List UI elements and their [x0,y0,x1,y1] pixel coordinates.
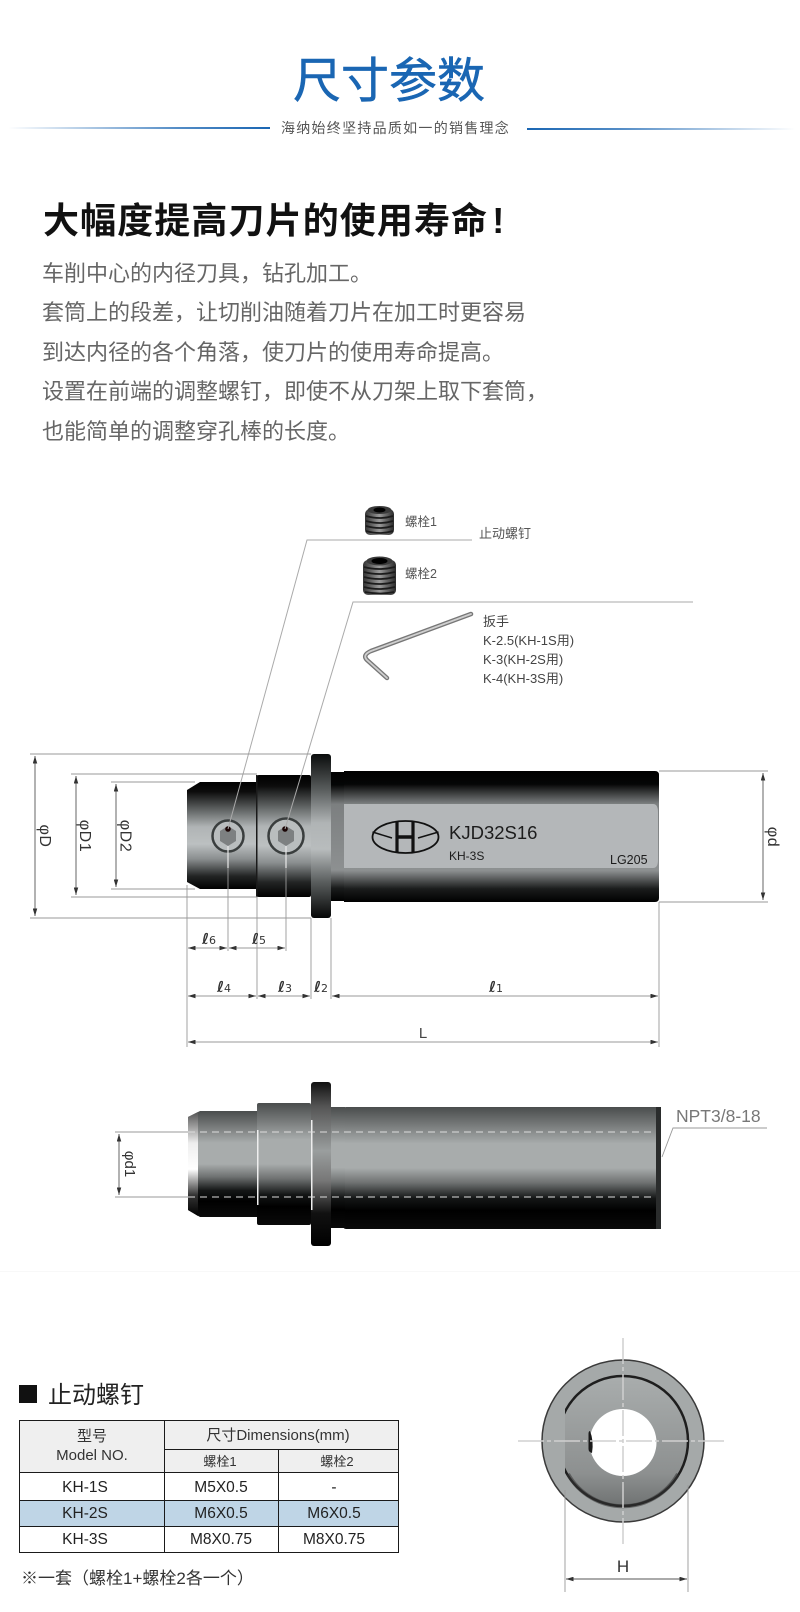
icon: hex wrench [365,614,471,678]
dimension labels: lengths: ℓ5 [251,930,266,948]
table: stop screw dimensions: KH-2S [62,1505,108,1522]
flange [311,754,331,918]
sleeve: rear view [188,1082,661,1246]
table: stop screw dimensions: M8X0.75 [303,1531,365,1548]
table: stop screw dimensions: M5X0.5 [194,1479,248,1496]
label: wrench sizes: K-4(KH-3S用) [483,671,563,686]
table: stop screw dimensions: 螺栓1 [203,1454,237,1469]
dimension: H: H [617,1557,629,1576]
neck [331,772,345,901]
dimension labels: lengths: ℓ3 [277,978,292,996]
dimension labels: diameters: φd [764,827,781,847]
icon: bolt 2 [363,556,396,595]
table: stop screw dimensions: M6X0.5 [307,1505,361,1522]
dimension lines: diameters [30,754,768,918]
white centre lines over screws [228,846,286,868]
dimension: bore d1: φd1 [121,1151,138,1177]
label: bolt 1: 螺栓1 [405,514,437,529]
dimension labels: lengths: L [419,1025,427,1042]
table: stop screw dimensions [20,1420,398,1552]
table: stop screw dimensions: 型号 [77,1428,107,1445]
dimension labels: lengths: ℓ2 [313,978,328,996]
footnote: ※一套（螺栓1+螺栓2各一个） [21,1569,254,1588]
table: stop screw dimensions: 螺栓2 [320,1454,354,1469]
dimension lines: lengths [187,868,659,1047]
engraved model: KJD32S16 [449,822,537,843]
engraved model [449,822,648,867]
centre lines [622,1338,624,1545]
description text: 也能简单的调整穿孔棒的长度。 [42,419,350,444]
logo [372,821,438,853]
table: stop screw dimensions: M6X0.5 [194,1505,248,1522]
dimension: bore d1 [115,1132,188,1197]
description text: 到达内径的各个角落，使刀片的使用寿命提高。 [42,340,504,365]
engraved model: KH-3S [449,849,484,863]
leader line: bolt 1 [228,540,472,829]
table: stop screw dimensions: KH-3S [62,1531,108,1548]
engraved model: LG205 [610,853,648,867]
label: NPT thread: NPT3/8-18 [676,1106,761,1126]
end view of sleeve [518,1338,726,1545]
description text: 车削中心的内径刀具，钻孔加工。 [42,261,372,286]
description text [42,261,548,444]
subtitle with gradient rules: 海纳始终坚持品质如一的销售理念 [281,120,510,136]
leader line: bolt 2 [285,602,693,829]
dimension labels: diameters [36,820,781,852]
dimension labels: diameters: φD2 [116,820,134,852]
screw hole 2 [268,818,304,854]
label: wrench sizes: K-2.5(KH-1S用) [483,633,574,648]
dimension labels: diameters: φD [36,824,53,848]
highlighted row [20,1500,398,1526]
icon: bolt 1 [365,506,394,535]
table: stop screw dimensions: - [331,1479,337,1496]
label: NPT thread [662,1106,767,1157]
label: wrench sizes: K-3(KH-2S用) [483,652,563,667]
table: stop screw dimensions: M8X0.75 [190,1531,252,1548]
table: stop screw dimensions: KH-1S [62,1479,108,1496]
dimension labels: diameters: φD1 [76,820,93,852]
title: 尺寸参数 [293,55,485,108]
heading: stop screw table: 止动螺钉 [48,1382,144,1409]
table header [20,1420,398,1472]
middle step [257,775,311,897]
main body [344,771,659,902]
dimension labels: lengths [201,930,503,1042]
milled flat [344,804,658,868]
label: wrench sizes: 扳手 [483,614,509,629]
dimension labels: lengths: ℓ6 [201,930,216,948]
screw hole 1 [212,820,244,852]
sleeve: side view [187,754,659,918]
dimension labels: lengths: ℓ4 [216,978,231,996]
label: wrench sizes [483,614,574,686]
nose section [187,782,258,889]
label: stop screw: 止动螺钉 [479,526,531,541]
dimension labels: lengths: ℓ1 [488,978,503,996]
label: bolt 2: 螺栓2 [405,566,437,581]
description text: 套筒上的段差，让切削油随着刀片在加工时更容易 [42,300,526,325]
table: stop screw dimensions: Model NO. [56,1447,128,1464]
description text: 设置在前端的调整螺钉，即使不从刀架上取下套筒， [42,379,548,404]
heading: 大幅度提高刀片的使用寿命! [43,200,505,241]
dimension: H [565,1485,688,1592]
table: stop screw dimensions: 尺寸Dimensions(mm) [206,1427,350,1444]
